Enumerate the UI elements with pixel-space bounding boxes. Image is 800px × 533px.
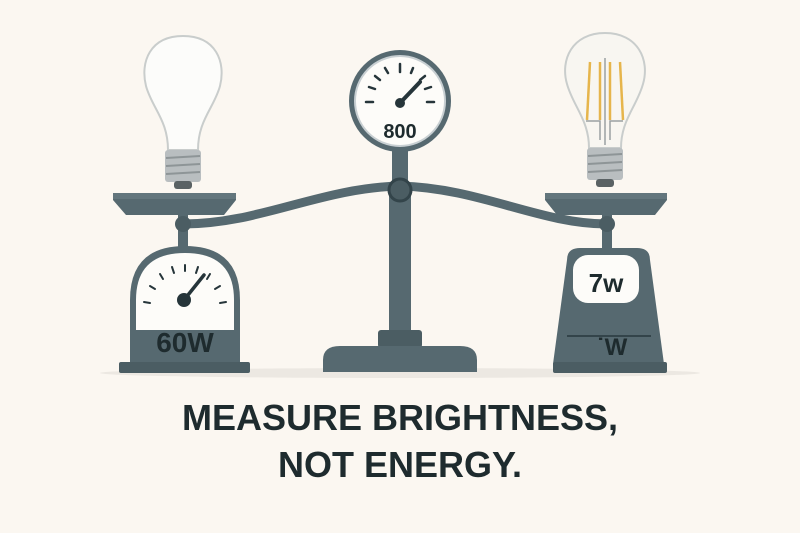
left pan (113, 193, 236, 250)
right bulb (565, 33, 645, 187)
left scale: 60W (119, 246, 250, 373)
right weight: 7w: 7w (589, 268, 624, 298)
title (182, 397, 618, 485)
floor shadow (100, 368, 700, 378)
right weight: 7w (553, 248, 667, 373)
title: NOT ENERGY. (278, 444, 522, 485)
left bulb (144, 36, 222, 189)
center gauge: 800: 800 (383, 121, 417, 143)
left scale: 60W: 60W (156, 327, 214, 358)
center stand (323, 148, 477, 372)
beam (183, 186, 607, 224)
title: MEASURE BRIGHTNESS, (182, 397, 618, 438)
right pan (545, 193, 667, 250)
center gauge: 800 (349, 50, 451, 152)
right weight: 7w: ˙W (597, 334, 628, 361)
